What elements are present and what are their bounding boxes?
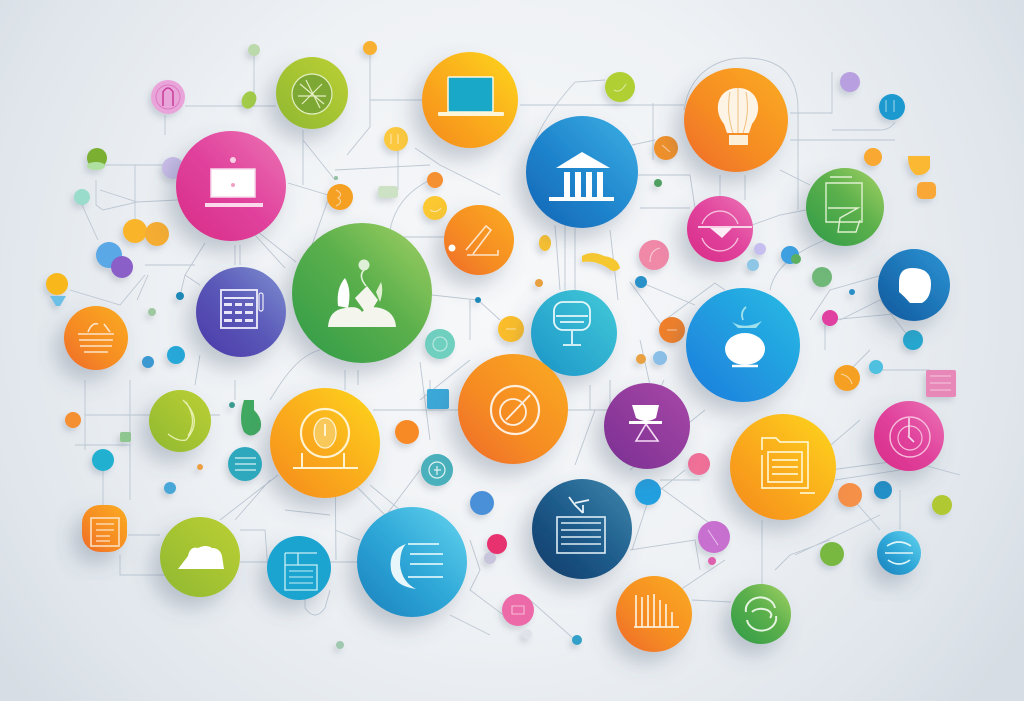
small decorative nodes — [46, 41, 956, 649]
icon circle: yellow gauge — [270, 388, 380, 498]
icon circle: teal small — [228, 447, 262, 481]
icon circle: orange light bulb — [684, 68, 788, 172]
icon circle: olive swirl — [149, 390, 211, 452]
icon circle: pink dial — [874, 401, 944, 471]
small node icon glyphs — [336, 84, 951, 614]
icon circle: violet chair — [604, 383, 690, 469]
icon circle: navy document — [532, 479, 632, 579]
icon circle: olive top — [276, 57, 348, 129]
icon circle: large green — [292, 223, 432, 363]
icon circle: orange pencil — [444, 205, 514, 275]
icon circle: pink rose — [151, 80, 185, 114]
icon circle: teal monitor — [531, 290, 617, 376]
node dots: right cluster — [635, 72, 956, 566]
node dots: top-left cluster — [46, 44, 260, 316]
icon circle: blue bank — [526, 116, 638, 228]
icon circle: teal document — [267, 536, 331, 600]
icon circle: magenta laptop — [176, 131, 286, 241]
icon circle: sky globe — [686, 288, 800, 402]
network connector lines — [70, 50, 960, 640]
icon circle: navy head — [878, 249, 950, 321]
node dots: bottom-left cluster — [65, 346, 582, 649]
icon circle: pink ring — [687, 196, 753, 262]
icon circle: yellow laptop — [422, 52, 518, 148]
icon circle: teal outline — [421, 454, 453, 486]
node dots: top-centre cluster — [327, 41, 678, 359]
icon circle: green clipboard — [806, 168, 884, 246]
icon circle: orange bar chart — [616, 576, 692, 652]
icon circle: green swirl — [731, 584, 791, 644]
icon circle: yellow folders — [730, 414, 836, 520]
icon circle: olive cloud — [160, 517, 240, 597]
icon circle: orange basket — [64, 306, 128, 370]
icon circle: orange target — [458, 354, 568, 464]
icon circle: sky crescent — [357, 507, 467, 617]
icon circle: purple calculator — [196, 267, 286, 357]
icon card: orange notes — [82, 505, 127, 552]
icon circle: teal swirl — [877, 531, 921, 575]
